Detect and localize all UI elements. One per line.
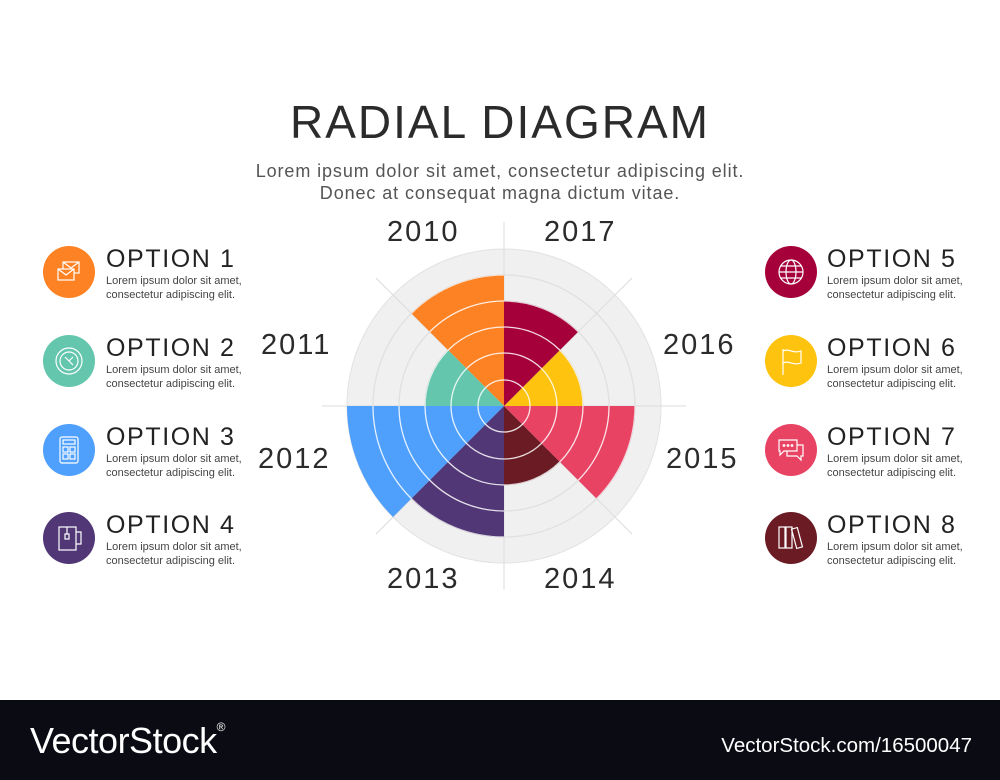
option 6: Lorem ipsum dolor sit amet,: [827, 364, 963, 376]
option 3: [43, 423, 242, 479]
option 8: consectetur adipiscing elit.: [827, 555, 956, 567]
option 5: OPTION 5: [827, 245, 956, 273]
option 1: OPTION 1: [106, 245, 236, 273]
option 6: consectetur adipiscing elit.: [827, 378, 956, 390]
year labels: 2017: [544, 216, 617, 248]
option 4: [43, 511, 242, 567]
option 8: [765, 511, 963, 567]
option 7: [765, 423, 963, 479]
radial chart: [322, 222, 686, 590]
footer url: VectorStock.com/16500047: [721, 734, 972, 757]
option 4: consectetur adipiscing elit.: [106, 555, 235, 567]
option 3: Lorem ipsum dolor sit amet,: [106, 453, 242, 465]
year labels: 2015: [666, 443, 739, 475]
option 3: consectetur adipiscing elit.: [106, 467, 235, 479]
option 7: consectetur adipiscing elit.: [827, 467, 956, 479]
year labels: 2016: [663, 329, 736, 361]
year labels: 2013: [387, 563, 460, 595]
option 5: Lorem ipsum dolor sit amet,: [827, 275, 963, 287]
subtitle: Donec at consequat magna dictum vitae.: [320, 183, 680, 203]
footer bar: [0, 700, 1000, 780]
option 3: OPTION 3: [106, 423, 236, 451]
year labels: 2012: [258, 443, 331, 475]
option 4: OPTION 4: [106, 511, 236, 539]
option 2: consectetur adipiscing elit.: [106, 378, 235, 390]
option 4: Lorem ipsum dolor sit amet,: [106, 541, 242, 553]
option 1: [43, 245, 242, 301]
footer logo: VectorStock®: [30, 720, 225, 761]
subtitle: Lorem ipsum dolor sit amet, consectetur adipiscing elit.: [256, 161, 744, 181]
option 7: OPTION 7: [827, 423, 956, 451]
option 7: Lorem ipsum dolor sit amet,: [827, 453, 963, 465]
option 2: Lorem ipsum dolor sit amet,: [106, 364, 242, 376]
option 8: Lorem ipsum dolor sit amet,: [827, 541, 963, 553]
option 6: OPTION 6: [827, 334, 956, 362]
subtitle: [256, 161, 744, 203]
option 2: [43, 334, 242, 390]
option 5: consectetur adipiscing elit.: [827, 289, 956, 301]
title: RADIAL DIAGRAM: [290, 96, 710, 148]
option 1: Lorem ipsum dolor sit amet,: [106, 275, 242, 287]
option 8: OPTION 8: [827, 511, 956, 539]
option 1: consectetur adipiscing elit.: [106, 289, 235, 301]
year labels: 2011: [261, 329, 331, 361]
year labels: 2014: [544, 563, 617, 595]
option 5: [765, 245, 963, 301]
year labels: 2010: [387, 216, 460, 248]
option 2: OPTION 2: [106, 334, 236, 362]
option 6: [765, 334, 963, 390]
